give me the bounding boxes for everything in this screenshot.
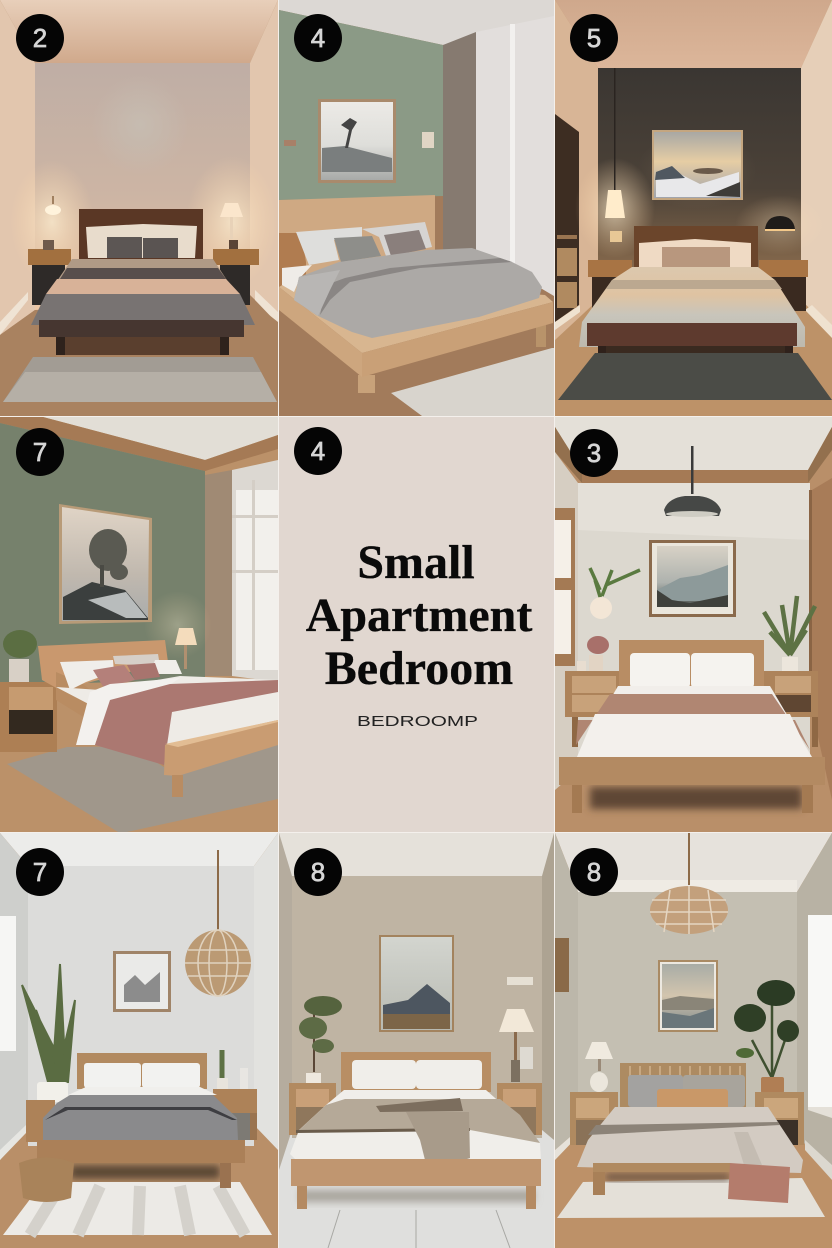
panel: room 4 green wall, pink throw — [0, 417, 278, 832]
subtitle: BEDROOMP — [357, 713, 478, 730]
badge: 7 — [16, 428, 64, 476]
wall art — [113, 951, 171, 1012]
title: Small — [357, 536, 475, 589]
title: Apartment — [306, 589, 532, 642]
icon: basket — [19, 1158, 74, 1202]
panel: room 1 warm bedroom — [0, 0, 278, 416]
badge: 7: 7 — [33, 437, 47, 467]
badge: 2: 2 — [33, 23, 47, 53]
icon: hanging lamp — [605, 68, 625, 218]
icon: plant with round vase — [590, 568, 640, 619]
panel: room 6 pendant and wood beam — [555, 417, 832, 832]
wall art — [658, 960, 718, 1032]
badge: 2 — [16, 14, 64, 62]
icon: snake plant — [22, 964, 75, 1102]
icon: monstera plant — [734, 980, 799, 1093]
wall art: tree on hill — [59, 504, 152, 624]
icon: wall lamp right — [765, 216, 795, 231]
panel: room 8 taupe walls with landscape — [279, 833, 554, 1248]
panel: title card — [279, 417, 554, 832]
table lamp — [499, 1009, 534, 1082]
small vase plant — [217, 1050, 248, 1089]
icon: tall plant — [764, 596, 815, 671]
wall art: tree — [318, 99, 396, 183]
badge: 7 lower — [16, 848, 64, 896]
panel: room 7 white walls with rattan pendant — [0, 833, 278, 1248]
badge: 4: 4 — [311, 23, 325, 53]
badge: 8 right — [570, 848, 618, 896]
panel: room 9 taupe walls with monstera — [555, 833, 832, 1248]
icon: rattan pendant — [650, 833, 728, 934]
badge: 5 — [570, 14, 618, 62]
striped rug — [3, 1182, 272, 1235]
table lamp right — [220, 203, 243, 230]
icon: wall lamp left — [45, 196, 61, 215]
badge: 8 right: 8 — [587, 857, 601, 887]
panel: room 2 sage green bedroom — [279, 0, 554, 416]
badge: 4 title card: 4 — [311, 436, 325, 466]
badge: 5: 5 — [587, 23, 601, 53]
badge: 4 — [294, 14, 342, 62]
badge: 8: 8 — [311, 857, 325, 887]
panel: room 3 dark accent wall — [555, 0, 832, 416]
wall art: misty mountains — [649, 540, 736, 617]
badge: 7 lower: 7 — [33, 857, 47, 887]
table lamp — [175, 628, 197, 669]
badge: 3: 3 — [587, 438, 601, 468]
wall art: sunset — [652, 130, 743, 200]
wall art: mountains — [379, 935, 454, 1032]
badge: 8 — [294, 848, 342, 896]
icon: rattan pendant — [185, 850, 251, 996]
badge: 3 — [570, 429, 618, 477]
table lamp — [585, 1042, 613, 1092]
icon: flowers — [577, 636, 609, 671]
icon: potted plant — [3, 630, 37, 682]
badge: 4 title card — [294, 427, 342, 475]
icon: tree plant — [299, 996, 342, 1083]
title: Bedroom — [325, 642, 513, 695]
icon: pendant lamp — [664, 446, 721, 517]
